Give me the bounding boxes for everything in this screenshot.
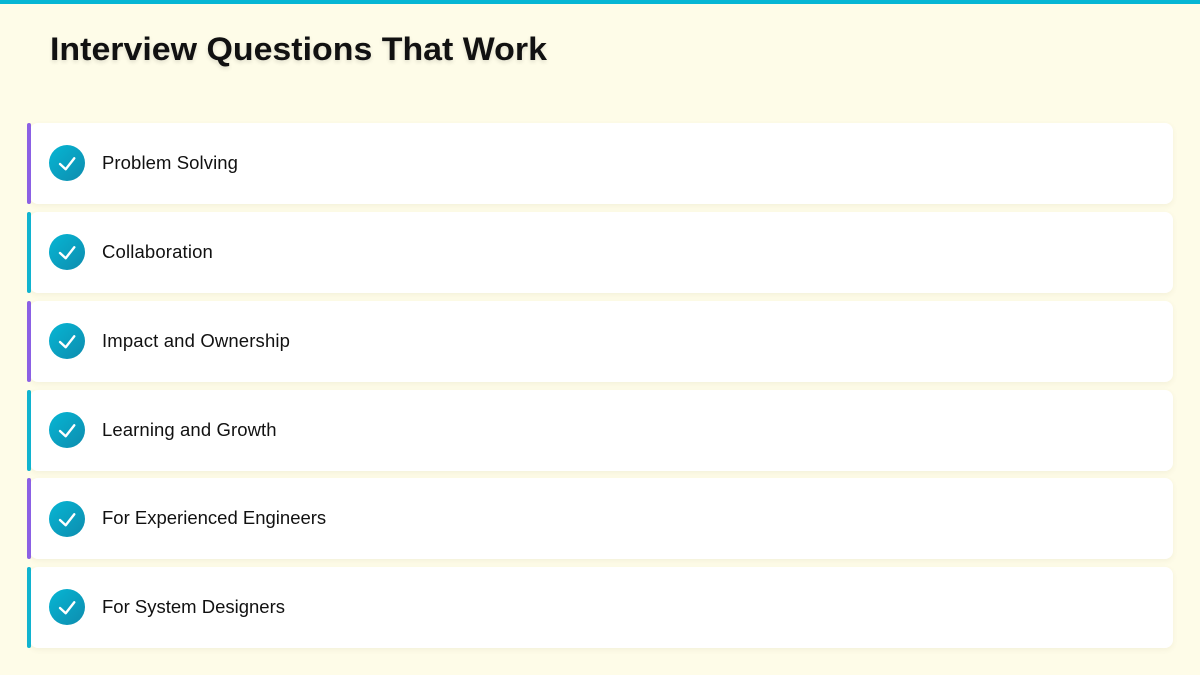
- icon: check circle: [49, 412, 85, 448]
- top accent bar: [0, 0, 1200, 4]
- icon: check circle: [49, 323, 85, 359]
- title: Interview Questions That Work: [50, 31, 547, 67]
- panel: Learning and Growth: [27, 390, 1173, 472]
- label: Learning and Growth: [102, 419, 277, 440]
- panel: For System Designers: [27, 567, 1173, 650]
- label: Problem Solving: [102, 152, 238, 173]
- panel: Problem Solving: [27, 123, 1173, 206]
- label: Impact and Ownership: [102, 330, 290, 351]
- label: For Experienced Engineers: [102, 507, 326, 528]
- icon: check circle: [49, 145, 85, 181]
- panel: For Experienced Engineers: [27, 478, 1173, 560]
- icon: check circle: [49, 501, 85, 537]
- icon: check circle: [49, 589, 85, 625]
- label: For System Designers: [102, 596, 285, 617]
- panel: Collaboration: [27, 212, 1173, 294]
- icon: check circle: [49, 234, 85, 270]
- label: Collaboration: [102, 241, 213, 262]
- panel: Impact and Ownership: [27, 301, 1173, 384]
